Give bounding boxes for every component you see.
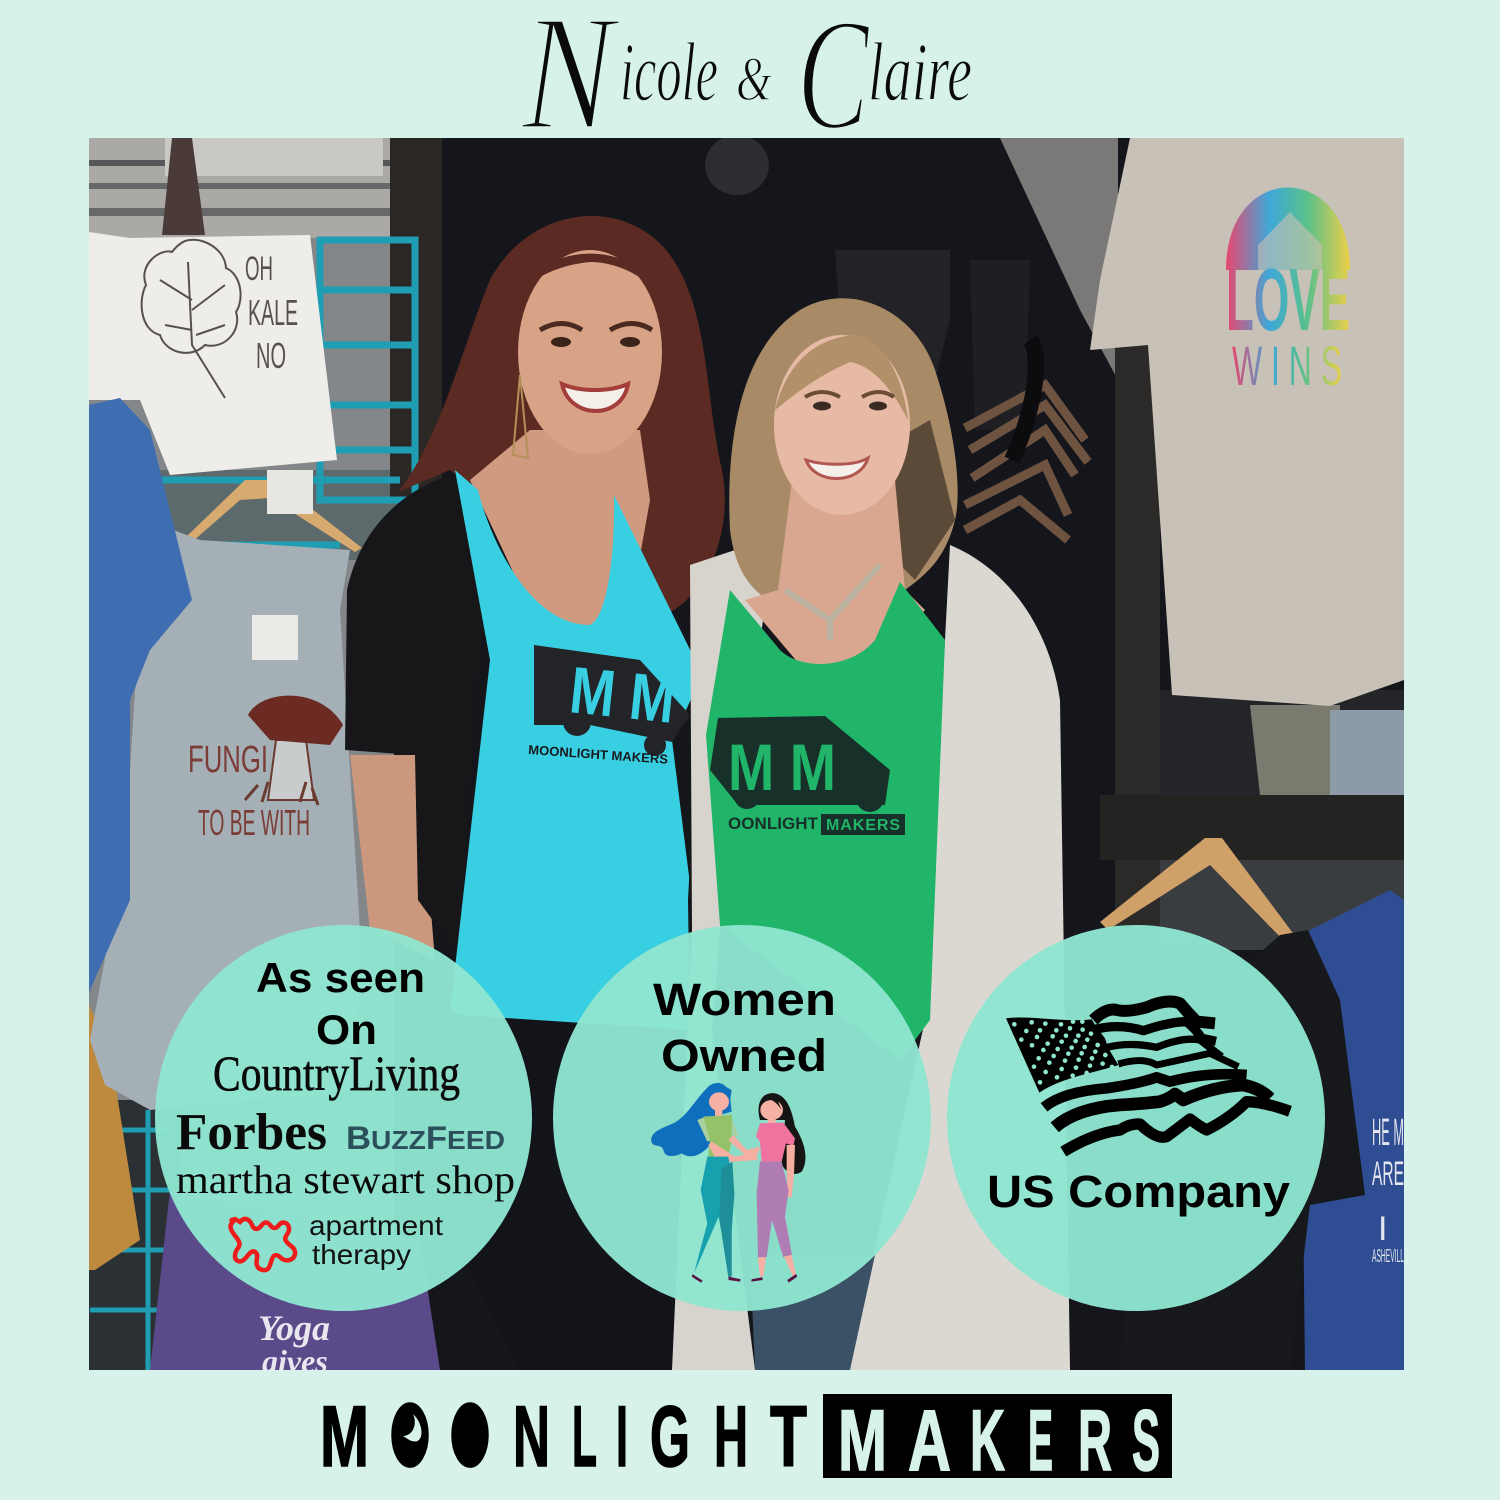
wordmark: moonlight: G xyxy=(650,1389,690,1485)
gray shirt: fungi: TO BE WITH xyxy=(198,802,310,843)
photo: Nicole and Claire at the shop xyxy=(89,135,1404,1379)
icon: american flag xyxy=(1006,1002,1290,1152)
title: & xyxy=(736,46,772,114)
shirt: oh kale no xyxy=(89,232,337,475)
Claire: OONLIGHT xyxy=(728,814,819,833)
badge: as seen on xyxy=(155,925,532,1311)
navy shirt: I xyxy=(1378,1210,1387,1248)
heading: on: On xyxy=(316,1006,377,1053)
blue shirt xyxy=(89,398,192,992)
text: ARE xyxy=(1372,1155,1404,1193)
wordmark: makers: A xyxy=(908,1393,951,1489)
wordmark: makers: R xyxy=(1078,1393,1112,1489)
logo: forbes: Forbes xyxy=(176,1104,327,1161)
wordmark: moonlight: O xyxy=(453,1389,488,1485)
hang tag xyxy=(267,470,313,514)
logo: moonlight makers xyxy=(320,1389,1172,1489)
wordmark: moonlight: L xyxy=(572,1389,597,1485)
back of shop xyxy=(705,135,1118,540)
Nicole: MOONLIGHT MAKERS xyxy=(528,742,669,767)
title xyxy=(520,0,972,164)
heading: women: Women xyxy=(653,974,836,1025)
Claire: MAKERS xyxy=(826,817,900,834)
wordmark: moonlight xyxy=(320,1389,807,1485)
Nicole: M M xyxy=(567,652,679,737)
wordmark: makers: E xyxy=(1028,1393,1053,1489)
wordmark: makers: K xyxy=(970,1393,1005,1489)
woman with black hair xyxy=(751,1093,805,1283)
logo: country living: CountryLiving xyxy=(213,1045,460,1101)
mustard garment xyxy=(89,1005,140,1270)
Claire: M M xyxy=(728,730,836,804)
wordmark: moonlight: N xyxy=(513,1389,550,1485)
title: laire xyxy=(868,26,972,119)
purple shirt: gives xyxy=(261,1343,328,1379)
shirt: oh kale no: NO xyxy=(256,335,286,376)
canton with stars xyxy=(1006,1017,1118,1093)
shirt: love wins xyxy=(1090,138,1404,706)
wordmark: makers xyxy=(823,1393,1172,1489)
shirt: love wins: LOVE xyxy=(1226,250,1350,349)
woman with blue hair xyxy=(651,1083,760,1283)
heading: owned: Owned xyxy=(661,1030,827,1081)
hanger right xyxy=(1100,838,1293,936)
logo: apartment therapy: therapy xyxy=(312,1239,411,1270)
right frame xyxy=(1115,330,1160,930)
wordmark: moonlight: O xyxy=(393,1389,428,1485)
logo: apartment therapy: apartment xyxy=(309,1210,443,1241)
Claire xyxy=(672,298,1070,1370)
heading: us company: US Company xyxy=(987,1166,1290,1217)
shirt: oh kale no: OH xyxy=(245,250,273,288)
purple shirt xyxy=(150,1190,440,1379)
title: icole xyxy=(620,26,718,119)
text: ASHEVILL xyxy=(1372,1246,1404,1266)
wordmark: moonlight: H xyxy=(714,1389,748,1485)
teal rack xyxy=(90,240,415,1370)
wordmark: moonlight: M xyxy=(320,1389,369,1485)
navy shirt xyxy=(1263,890,1404,1370)
text: HE M xyxy=(1372,1112,1404,1154)
badge: women owned xyxy=(553,925,931,1311)
wordmark: moonlight: I xyxy=(616,1389,628,1485)
purple shirt: Yoga xyxy=(258,1308,330,1348)
logo: apartment therapy xyxy=(231,1210,443,1270)
flag stripes xyxy=(1044,1002,1290,1152)
gray shirt: fungi xyxy=(90,528,360,1110)
hanger left xyxy=(185,480,362,552)
shirt: love wins: W I N S xyxy=(1232,334,1342,397)
badge: us company xyxy=(947,925,1325,1311)
shirt: oh kale no: KALE xyxy=(248,292,298,333)
wordmark: moonlight: T xyxy=(770,1389,807,1485)
icon: two women xyxy=(651,1083,805,1283)
logo: martha stewart shop: martha stewart shop xyxy=(176,1157,515,1202)
heading: as seen: As seen xyxy=(256,954,425,1001)
door frame xyxy=(390,138,442,498)
gray shirt: fungi: FUNGI xyxy=(188,739,268,781)
Nicole xyxy=(345,216,725,1023)
wordmark: makers: S xyxy=(1132,1393,1160,1489)
right window xyxy=(1100,690,1404,950)
left wall xyxy=(89,138,400,1370)
logo: buzzfeed: BUZZFEED xyxy=(346,1120,505,1156)
wordmark: makers: M xyxy=(838,1393,887,1489)
